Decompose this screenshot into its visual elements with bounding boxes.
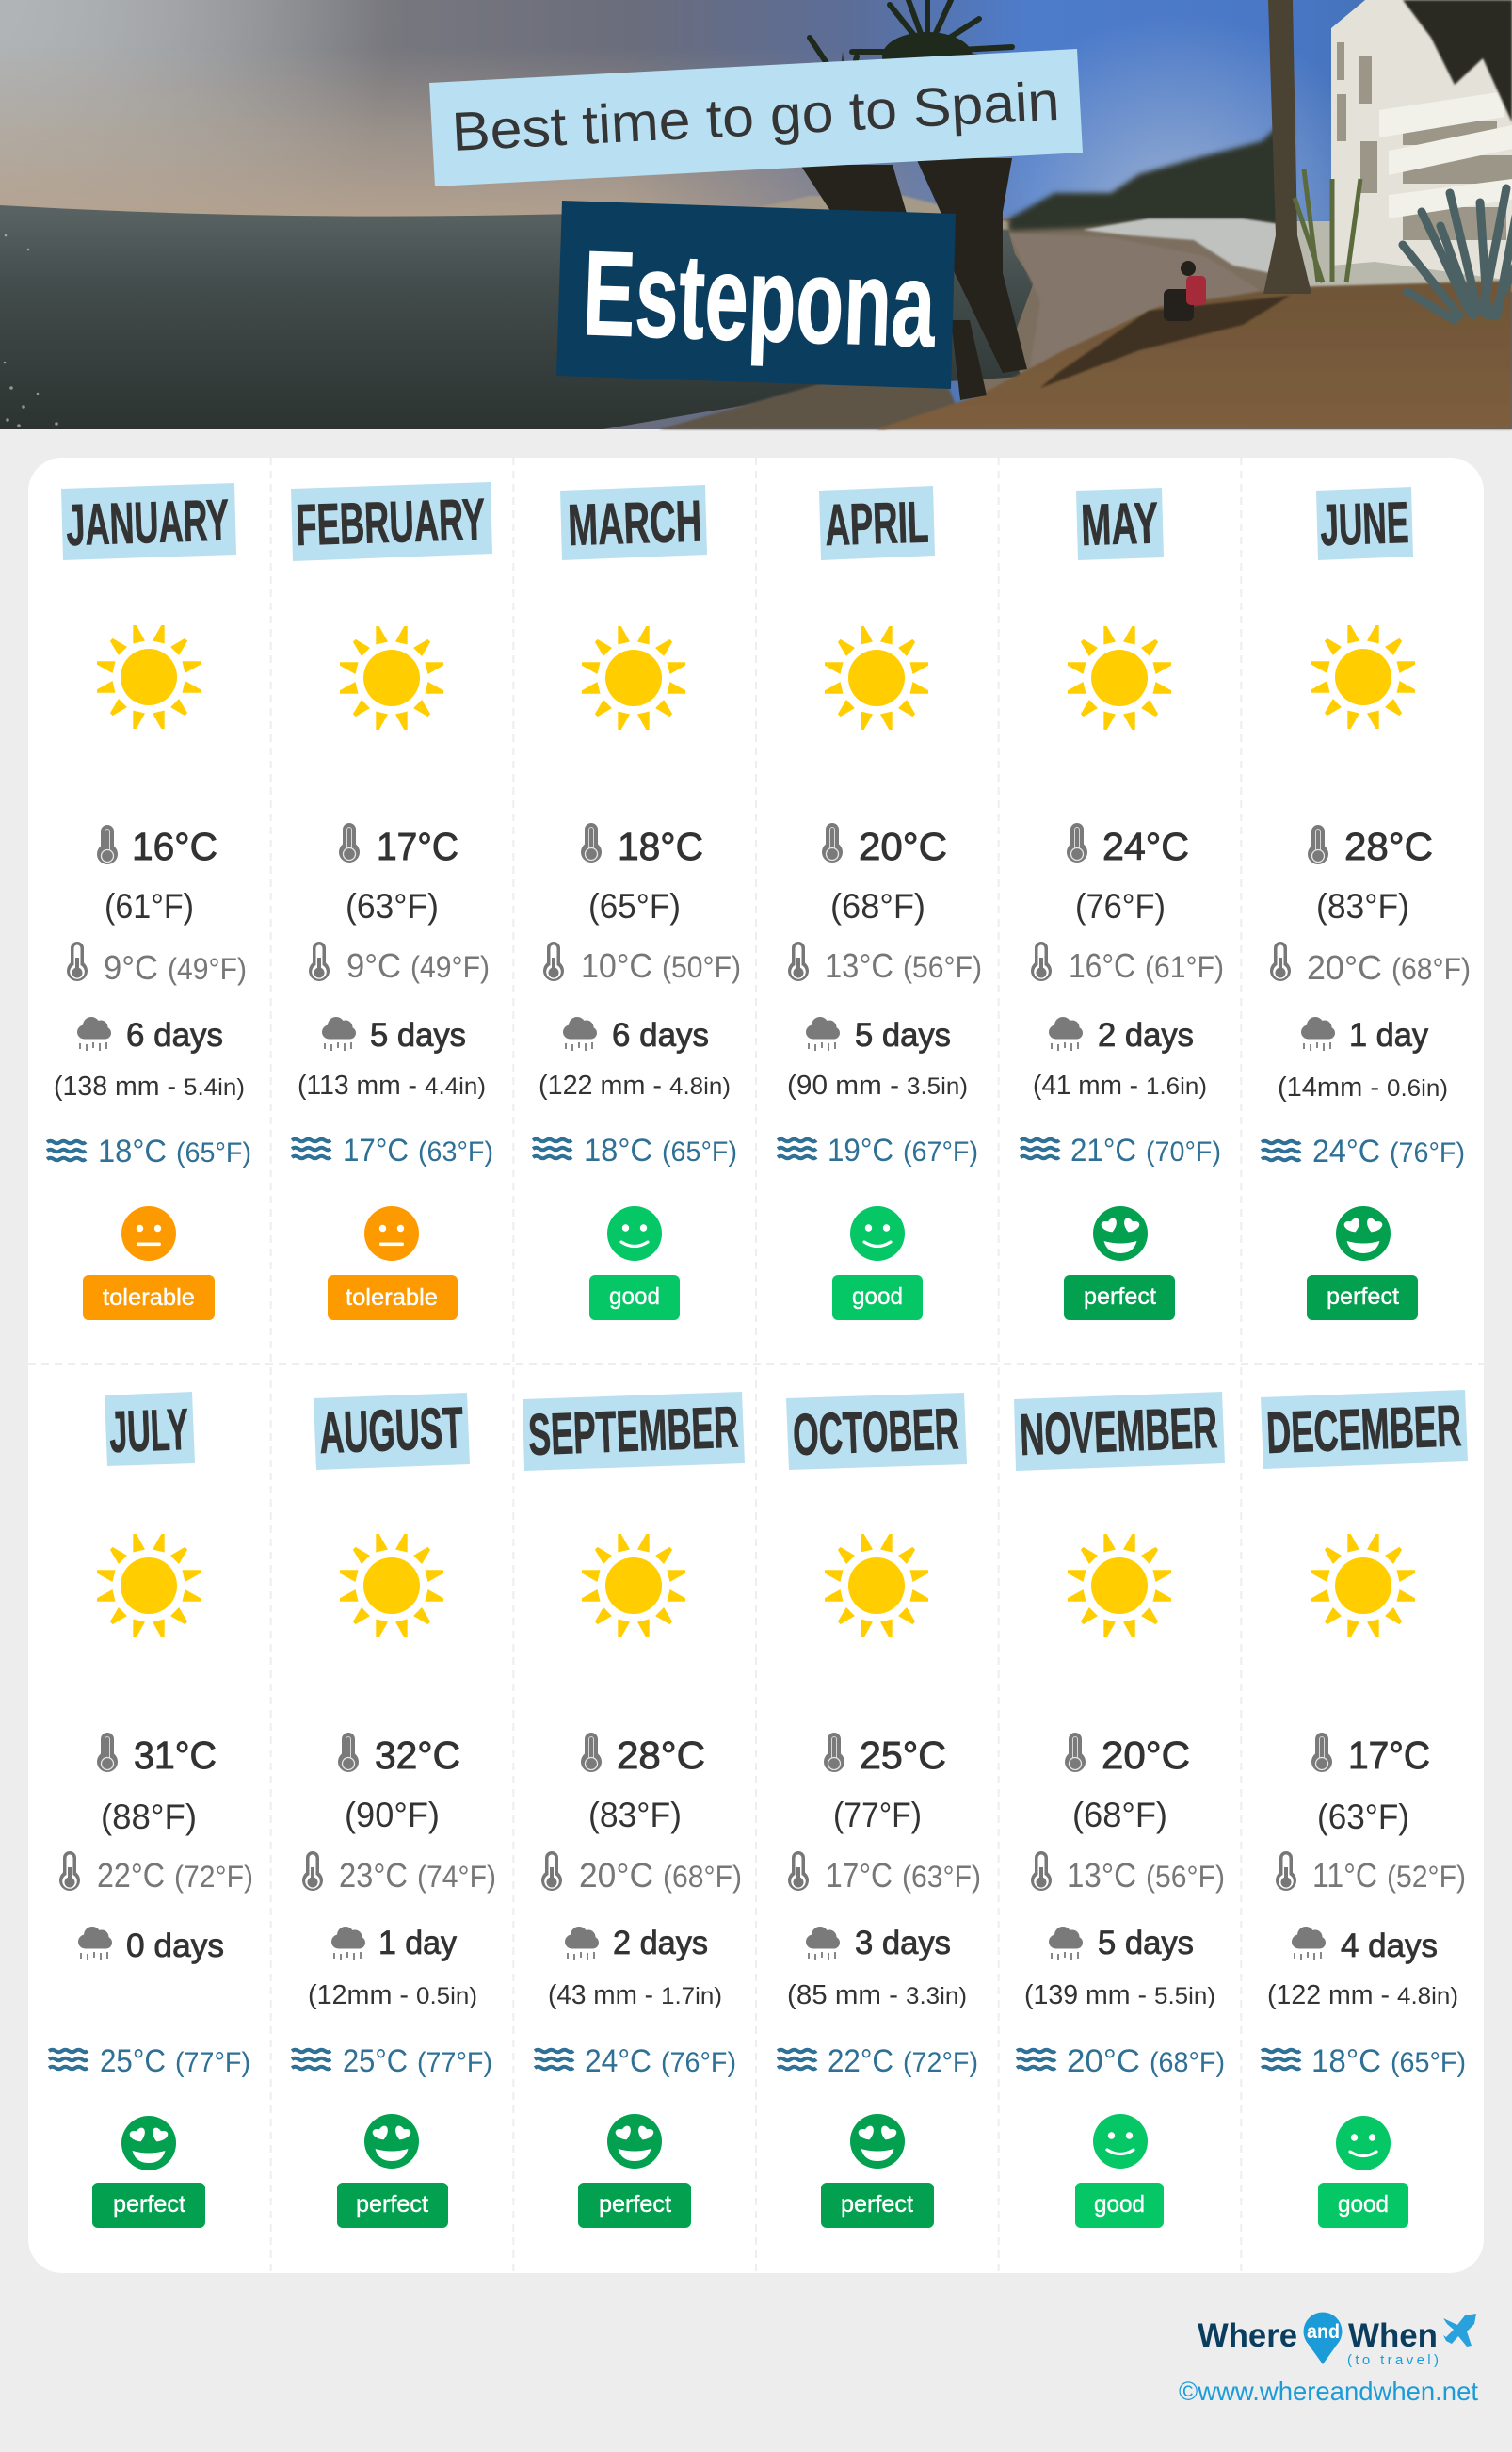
rainfall: 6 days	[612, 1017, 709, 1054]
high temperature: (88°F)	[101, 1798, 197, 1836]
high temperature: 20°C	[1102, 1734, 1190, 1777]
rainfall: 0.5in)	[416, 1983, 477, 2009]
sea temperature: 22°C	[828, 2043, 893, 2079]
high temperature	[1308, 825, 1433, 926]
low temperature: (61°F)	[1145, 950, 1224, 984]
low temperature: (68°F)	[1391, 952, 1471, 986]
heading: May	[1076, 488, 1164, 560]
rainfall	[539, 1017, 731, 1101]
rainfall	[1267, 1927, 1458, 2010]
rainfall: (41 mm -	[1033, 1071, 1138, 1101]
heading: March: MARCH	[567, 489, 702, 558]
sea temperature: (65°F)	[176, 1137, 251, 1169]
icon: sun	[1068, 626, 1171, 730]
low temperature: (56°F)	[903, 950, 982, 984]
heading: March	[560, 485, 707, 560]
rainfall: 4.4in)	[425, 1073, 486, 1100]
high temperature	[824, 1733, 946, 1834]
heading: April	[819, 486, 935, 560]
heading: September: SEPTEMBER	[527, 1395, 739, 1468]
rainfall: (138 mm -	[54, 1072, 176, 1102]
heading: August	[314, 1393, 470, 1470]
low temperature: 10°C	[581, 946, 652, 985]
heading: June	[1316, 487, 1413, 560]
sea temperature: 21°C	[1070, 1133, 1136, 1169]
rating: perfect	[1307, 1206, 1418, 1320]
title banner: Estepona: Estepona	[581, 226, 938, 373]
rainfall: 1.6in)	[1146, 1073, 1207, 1100]
high temperature: 28°C	[617, 1734, 705, 1777]
rainfall	[787, 1017, 968, 1101]
low temperature: 13°C	[1067, 1856, 1136, 1895]
high temperature: 16°C	[132, 825, 217, 868]
rainfall	[1033, 1017, 1207, 1101]
rainfall: 2 days	[613, 1925, 708, 1961]
heading: February: FEBRUARY	[295, 487, 486, 558]
heading: October	[786, 1393, 967, 1470]
rating: perfect	[92, 2116, 205, 2228]
heading: October: OCTOBER	[792, 1396, 959, 1468]
sea temperature: 25°C	[100, 2043, 166, 2079]
rainfall	[298, 1017, 486, 1101]
sea temperature: 24°C	[1312, 1134, 1380, 1170]
title banner: Best time to go to Spain: Best time to go to Spain	[450, 71, 1061, 163]
panel: September	[523, 1392, 745, 2228]
sea temperature: (77°F)	[417, 2047, 492, 2078]
rainfall	[54, 1017, 245, 1102]
sea temperature: 18°C	[98, 1134, 167, 1170]
high temperature: (83°F)	[1316, 887, 1409, 926]
sea temperature: (77°F)	[175, 2047, 250, 2078]
website credit: ©www.whereandwhen.net	[1179, 2377, 1478, 2406]
low temperature	[302, 1851, 496, 1895]
panel: October	[778, 1393, 981, 2228]
icon: sun	[97, 625, 201, 729]
high temperature	[581, 1733, 705, 1834]
heading: July: JULY	[108, 1397, 189, 1465]
high temperature	[1067, 823, 1189, 926]
sea temperature: 20°C	[1067, 2043, 1140, 2079]
title banner: Estepona	[556, 201, 956, 389]
heading: August: AUGUST	[318, 1395, 464, 1466]
icon: sun	[340, 1534, 443, 1637]
icon: sun	[582, 1534, 685, 1637]
rainfall: 3 days	[855, 1925, 951, 1961]
rainfall: (113 mm -	[298, 1071, 417, 1101]
rating: good: good	[609, 1283, 660, 1310]
high temperature: 25°C	[860, 1734, 946, 1777]
title banner: Best time to go to Spain	[429, 49, 1083, 186]
rainfall: 6 days	[126, 1017, 223, 1054]
high temperature: (63°F)	[346, 887, 439, 926]
low temperature: (74°F)	[417, 1860, 496, 1894]
high temperature: 17°C	[1348, 1734, 1430, 1777]
rating: perfect: perfect	[1327, 1283, 1399, 1310]
logo: Where and When (to travel): (to travel)	[1347, 2352, 1439, 2368]
low temperature: 9°C	[346, 946, 401, 985]
high temperature	[581, 823, 703, 926]
heading: September	[523, 1392, 745, 1471]
sea temperature: (68°F)	[1150, 2047, 1225, 2078]
low temperature: 13°C	[825, 946, 893, 985]
rainfall: 0.6in)	[1387, 1075, 1448, 1102]
sea temperature: 24°C	[585, 2043, 651, 2079]
sea temperature	[1017, 2043, 1225, 2079]
logo: Where and When (to travel): and	[1307, 2321, 1340, 2343]
low temperature: (72°F)	[174, 1860, 253, 1894]
rating: perfect: perfect	[599, 2191, 671, 2218]
heading: January: JANUARY	[65, 488, 230, 558]
sea temperature	[535, 2043, 736, 2079]
heading: April: APRIL	[824, 490, 929, 558]
low temperature: 20°C	[579, 1856, 653, 1895]
rating: tolerable	[83, 1206, 215, 1320]
panel: November	[1014, 1392, 1225, 2228]
high temperature: (61°F)	[105, 887, 194, 926]
panel: January	[47, 483, 251, 1320]
sea temperature	[1262, 1134, 1465, 1170]
high temperature	[1311, 1733, 1430, 1836]
rainfall: 2 days	[1098, 1017, 1194, 1054]
rating: good	[1318, 2116, 1408, 2228]
low temperature: (49°F)	[410, 950, 490, 984]
rating: perfect: perfect	[841, 2191, 913, 2218]
panel: May	[1021, 488, 1224, 1320]
icon: sun	[1068, 1534, 1171, 1637]
panel: June	[1262, 487, 1471, 1320]
high temperature	[1065, 1733, 1190, 1834]
low temperature	[1031, 942, 1224, 985]
high temperature: (77°F)	[833, 1796, 922, 1834]
rating: tolerable: tolerable	[346, 1284, 438, 1311]
heading: July	[105, 1392, 195, 1466]
low temperature: (52°F)	[1387, 1860, 1466, 1894]
panel: August	[292, 1393, 496, 2228]
high temperature: (76°F)	[1075, 887, 1166, 926]
sea temperature	[1021, 1133, 1221, 1169]
logo: Where and When (to travel): Where	[1198, 2317, 1297, 2354]
rating: perfect	[578, 2114, 691, 2228]
rainfall	[548, 1925, 722, 2010]
sea temperature: (72°F)	[903, 2047, 978, 2078]
rainfall	[1024, 1925, 1215, 2010]
panel: monthly calendar card	[28, 458, 1484, 2273]
sea temperature	[533, 1133, 737, 1169]
low temperature	[788, 1851, 981, 1895]
sea temperature	[292, 1133, 493, 1169]
heading: June: JUNE	[1319, 491, 1409, 558]
heading: January	[61, 483, 236, 560]
high temperature	[339, 823, 458, 926]
rating: tolerable: tolerable	[103, 1284, 195, 1311]
panel: December	[1261, 1390, 1468, 2228]
high temperature: 32°C	[375, 1734, 460, 1777]
rainfall: 0 days	[126, 1928, 224, 1964]
rating: perfect	[337, 2114, 448, 2228]
panel: April	[778, 486, 982, 1320]
rating: perfect: perfect	[113, 2191, 185, 2218]
heading: November: NOVEMBER	[1019, 1395, 1218, 1468]
sea temperature: (76°F)	[1390, 1137, 1465, 1169]
low temperature: 11°C	[1312, 1856, 1377, 1895]
low temperature: (50°F)	[662, 950, 741, 984]
rating: good: good	[852, 1283, 903, 1310]
low temperature	[543, 942, 741, 985]
rainfall	[1278, 1017, 1448, 1103]
rating: good	[1075, 2114, 1164, 2228]
sea temperature: (70°F)	[1146, 1137, 1221, 1168]
rating: perfect: perfect	[356, 2191, 428, 2218]
low temperature	[788, 942, 982, 985]
low temperature	[67, 942, 247, 987]
rating: tolerable	[328, 1206, 458, 1320]
rating: perfect	[1064, 1206, 1175, 1320]
rainfall: (122 mm -	[1267, 1980, 1390, 2010]
high temperature: (63°F)	[1317, 1798, 1409, 1836]
logo: Where and When (to travel): When	[1348, 2317, 1438, 2354]
rainfall: (85 mm -	[787, 1980, 898, 2010]
low temperature: (63°F)	[902, 1860, 981, 1894]
icon: sun	[1311, 625, 1415, 729]
high temperature: (65°F)	[588, 887, 681, 926]
panel: July	[49, 1392, 253, 2228]
high temperature: (90°F)	[345, 1796, 440, 1834]
rainfall: (122 mm -	[539, 1071, 662, 1101]
rainfall: 5 days	[1098, 1925, 1194, 1961]
icon: sun	[1311, 1534, 1415, 1637]
rainfall: 5.4in)	[184, 1074, 245, 1101]
low temperature	[541, 1851, 742, 1895]
sea temperature: (67°F)	[903, 1137, 978, 1168]
high temperature: 17°C	[377, 825, 458, 868]
low temperature	[59, 1851, 253, 1895]
sea temperature	[49, 2043, 250, 2079]
high temperature: (83°F)	[588, 1796, 682, 1834]
rainfall: 1 day	[378, 1925, 457, 1961]
low temperature	[309, 942, 490, 985]
sea temperature	[778, 1133, 978, 1169]
sea temperature: (65°F)	[662, 1137, 737, 1168]
low temperature: 23°C	[339, 1856, 408, 1895]
high temperature	[822, 823, 947, 926]
heading: May: MAY	[1080, 491, 1159, 558]
heading: November	[1014, 1392, 1225, 1471]
logo: Where and When (to travel)	[1198, 2313, 1476, 2368]
low temperature: (49°F)	[168, 952, 247, 986]
icon: sun	[825, 1534, 928, 1637]
rainfall: 1 day	[1349, 1017, 1428, 1054]
rating: perfect: perfect	[1084, 1283, 1156, 1310]
sea temperature: (65°F)	[1391, 2047, 1466, 2078]
rating: perfect	[821, 2114, 934, 2228]
rainfall: (43 mm -	[548, 1980, 653, 2010]
sea temperature: (63°F)	[418, 1137, 493, 1168]
low temperature	[1031, 1851, 1225, 1895]
rainfall	[308, 1925, 477, 2010]
icon: sun	[825, 626, 928, 730]
sea temperature: (76°F)	[661, 2047, 736, 2078]
high temperature: 31°C	[134, 1734, 217, 1777]
high temperature: (68°F)	[830, 887, 925, 926]
low temperature: 9°C	[104, 948, 158, 987]
low temperature: (56°F)	[1146, 1860, 1225, 1894]
heading: February	[291, 482, 492, 561]
icon: map pin	[1304, 2313, 1343, 2364]
rainfall: 5.5in)	[1154, 1983, 1215, 2009]
sea temperature: 17°C	[343, 1133, 409, 1169]
rainfall: 5 days	[370, 1017, 466, 1054]
rainfall: (139 mm -	[1024, 1980, 1147, 2010]
high temperature: 20°C	[859, 825, 947, 868]
rainfall: 3.5in)	[907, 1073, 968, 1100]
panel: February	[291, 482, 493, 1320]
low temperature: 17°C	[826, 1856, 893, 1895]
low temperature: 16°C	[1069, 946, 1135, 985]
rainfall: 4 days	[1341, 1928, 1438, 1964]
low temperature	[1270, 942, 1471, 987]
high temperature	[97, 1733, 217, 1836]
sea temperature	[1262, 2043, 1466, 2079]
sea temperature	[47, 1134, 251, 1170]
low temperature: (68°F)	[663, 1860, 742, 1894]
sea temperature: 18°C	[584, 1133, 652, 1169]
rainfall: 5 days	[855, 1017, 951, 1054]
sea temperature: 19°C	[828, 1133, 893, 1169]
high temperature: 24°C	[1102, 825, 1189, 868]
high temperature: 18°C	[618, 825, 703, 868]
rainfall: (14mm -	[1278, 1073, 1379, 1103]
icon: airplane	[1443, 2314, 1476, 2347]
icon: sun	[97, 1534, 201, 1637]
header photo: Estepona seafront	[0, 0, 1512, 429]
low temperature: 22°C	[97, 1856, 165, 1895]
rainfall: 3.3in)	[906, 1983, 967, 2009]
rainfall: (12mm -	[308, 1980, 409, 2010]
rainfall	[787, 1925, 967, 2010]
high temperature: 28°C	[1344, 825, 1433, 868]
sea temperature	[292, 2043, 492, 2079]
high temperature	[338, 1733, 460, 1834]
panel: March	[533, 485, 741, 1320]
sea temperature: 18°C	[1311, 2043, 1381, 2079]
rating: good	[832, 1206, 923, 1320]
rating: good: good	[1094, 2191, 1145, 2218]
rainfall: 4.8in)	[1397, 1983, 1458, 2009]
low temperature: 20°C	[1307, 948, 1382, 987]
rainfall: (90 mm -	[787, 1071, 899, 1101]
rainfall: 1.7in)	[661, 1983, 722, 2009]
icon: sun	[582, 626, 685, 730]
rating: good: good	[1338, 2191, 1389, 2218]
rainfall: 4.8in)	[669, 1073, 731, 1100]
rainfall	[78, 1927, 224, 1964]
rating: good	[589, 1206, 680, 1320]
sea temperature: 25°C	[343, 2043, 408, 2079]
sea temperature	[778, 2043, 978, 2079]
high temperature	[97, 825, 217, 926]
low temperature	[1276, 1851, 1466, 1895]
high temperature: (68°F)	[1072, 1796, 1167, 1834]
icon: sun	[340, 626, 443, 730]
